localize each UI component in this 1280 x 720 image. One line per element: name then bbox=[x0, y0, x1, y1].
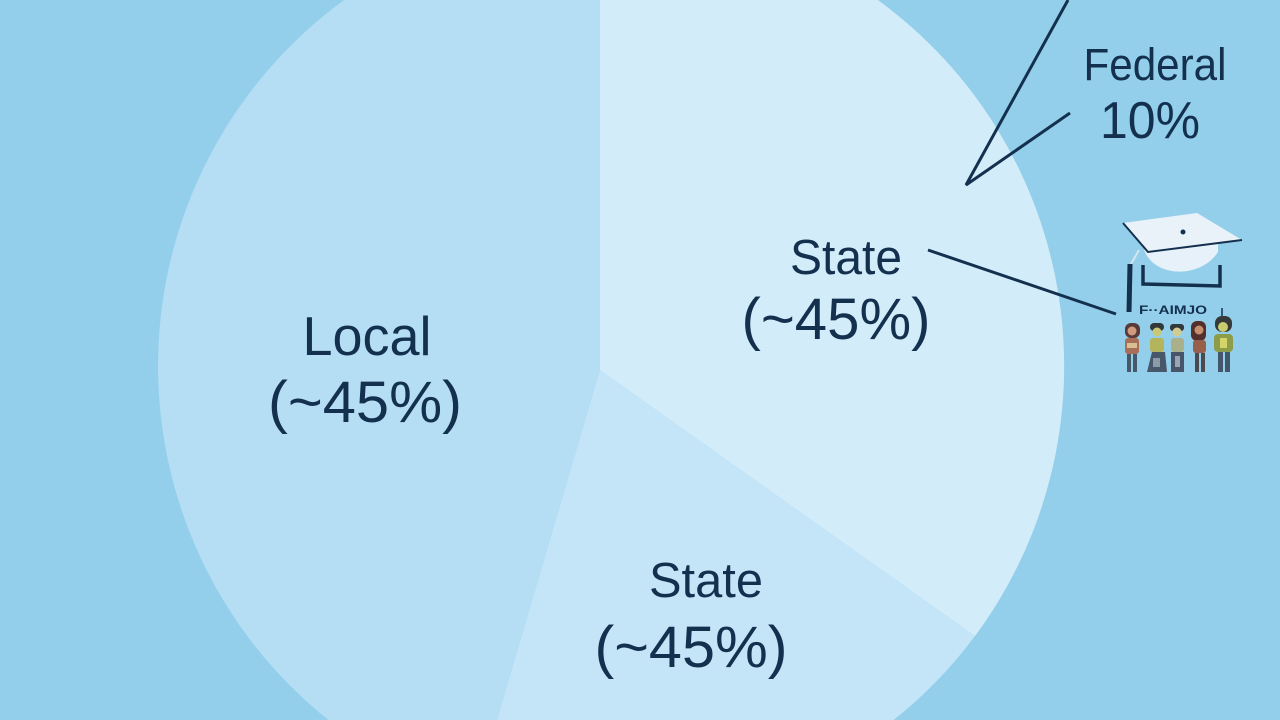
pie chart bbox=[158, 0, 1064, 720]
student 1 bbox=[1125, 323, 1140, 372]
label: state right: (~45%) bbox=[742, 287, 930, 352]
label: state right bbox=[742, 231, 930, 352]
label: federal bbox=[1084, 39, 1226, 150]
cap body bbox=[1143, 236, 1218, 272]
slice: state right bbox=[600, 0, 1064, 636]
student 4 bbox=[1191, 321, 1206, 372]
cap strap bbox=[1143, 265, 1220, 286]
label: state bottom: (~45%) bbox=[594, 615, 788, 680]
slice: local bbox=[158, 0, 600, 720]
arrow: state leader line to icon bbox=[928, 250, 1116, 314]
arrow: federal leader lines bbox=[966, 0, 1070, 185]
label: local: (~45%) bbox=[268, 370, 462, 435]
label: local: Local bbox=[302, 305, 432, 367]
slice: state bottom bbox=[497, 370, 975, 720]
student 2 bbox=[1147, 323, 1167, 372]
label: state bottom: State bbox=[649, 554, 763, 608]
label: federal: Federal bbox=[1084, 39, 1226, 90]
cap board bbox=[1123, 213, 1242, 252]
student 5 bbox=[1214, 308, 1233, 372]
label: local bbox=[268, 305, 462, 435]
small caption: F··AIMJO bbox=[1139, 303, 1207, 317]
icon: graduation cap and students bbox=[1123, 213, 1242, 372]
tassel bbox=[1131, 250, 1139, 264]
student 3 bbox=[1170, 324, 1184, 372]
label: federal: 10% bbox=[1100, 92, 1200, 150]
label: state right: State bbox=[790, 231, 902, 285]
label: state bottom bbox=[594, 554, 788, 680]
